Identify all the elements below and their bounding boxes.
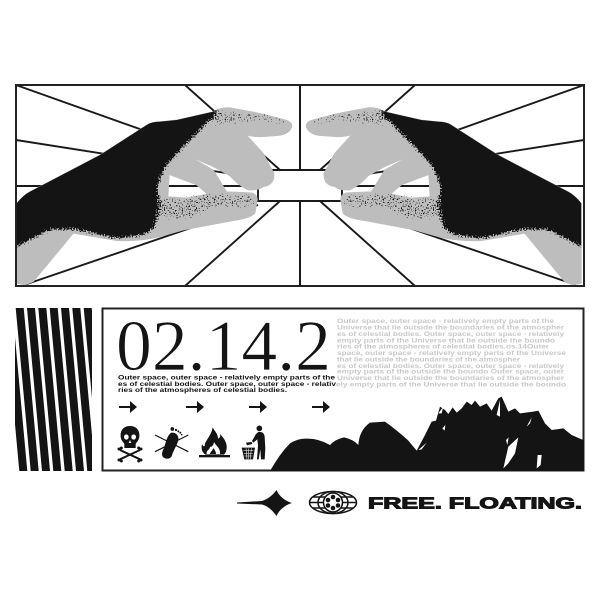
black body text: ries of the atmospheres of celestial bodies. xyxy=(118,387,287,394)
center bar outline xyxy=(258,85,342,286)
hand: left xyxy=(0,103,292,285)
gray body text: es of celestial bodies. Outer space, outer space - relatively xyxy=(337,363,565,370)
radiating frame lines xyxy=(16,85,584,286)
icon: flammable xyxy=(199,427,230,457)
arrows row xyxy=(119,401,330,413)
footer title: FREE. FLOATING. xyxy=(368,496,582,512)
panel: info box xyxy=(102,308,584,470)
gray body text: Universe that lie outside the boundaries of the atmospher xyxy=(337,324,565,332)
black body text: es of celestial bodies. Outer space, outer space - relativ xyxy=(118,381,337,388)
frame outline xyxy=(16,85,584,286)
gray body text: ries of the atmospheres of celestial bodies.os.14Outer xyxy=(337,344,550,350)
footer star arrow xyxy=(237,490,292,516)
gray body text: ely empty parts of the Universe that lie outside the boundo xyxy=(336,382,566,388)
gray body text: space, outer space - relatively empty parts of the Universe xyxy=(337,350,567,357)
panel: hands illustration xyxy=(0,85,600,286)
center bar xyxy=(258,170,342,201)
date heading: 02.14.2 xyxy=(116,306,331,386)
gray body text: Universe that lie outside the boundaries of the atmospher xyxy=(337,375,565,382)
icon: recycle bin figure xyxy=(242,425,265,459)
mountain silhouette xyxy=(270,397,584,471)
black body text: Outer space, outer space - relatively empty parts of the xyxy=(118,374,336,382)
gray body text: that lie outside the boundaries of the atmospher xyxy=(337,356,521,364)
hand: right xyxy=(306,103,600,285)
gray body text: es of celestial bodies. Outer space, outer space - relatively xyxy=(337,331,565,338)
gray body text: Outer space, outer space - relatively empty parts of the xyxy=(337,318,555,325)
poster xyxy=(15,84,585,516)
diagonal stripes xyxy=(15,308,92,471)
arrow 2 xyxy=(186,401,204,413)
black body text xyxy=(118,374,337,394)
arrow 4 xyxy=(312,401,330,413)
gray body text xyxy=(336,318,567,388)
icon: no bare feet xyxy=(155,427,188,459)
icon: skull and crossbones xyxy=(117,426,142,462)
footer globe logo xyxy=(310,492,356,514)
arrow 3 xyxy=(249,401,267,413)
arrow 1 xyxy=(119,401,137,413)
gray body text: empty parts of the Universe that lie outside the boundo xyxy=(337,338,555,344)
gray body text: empty parts of the outside the boundo Outer space, outer xyxy=(337,368,565,376)
